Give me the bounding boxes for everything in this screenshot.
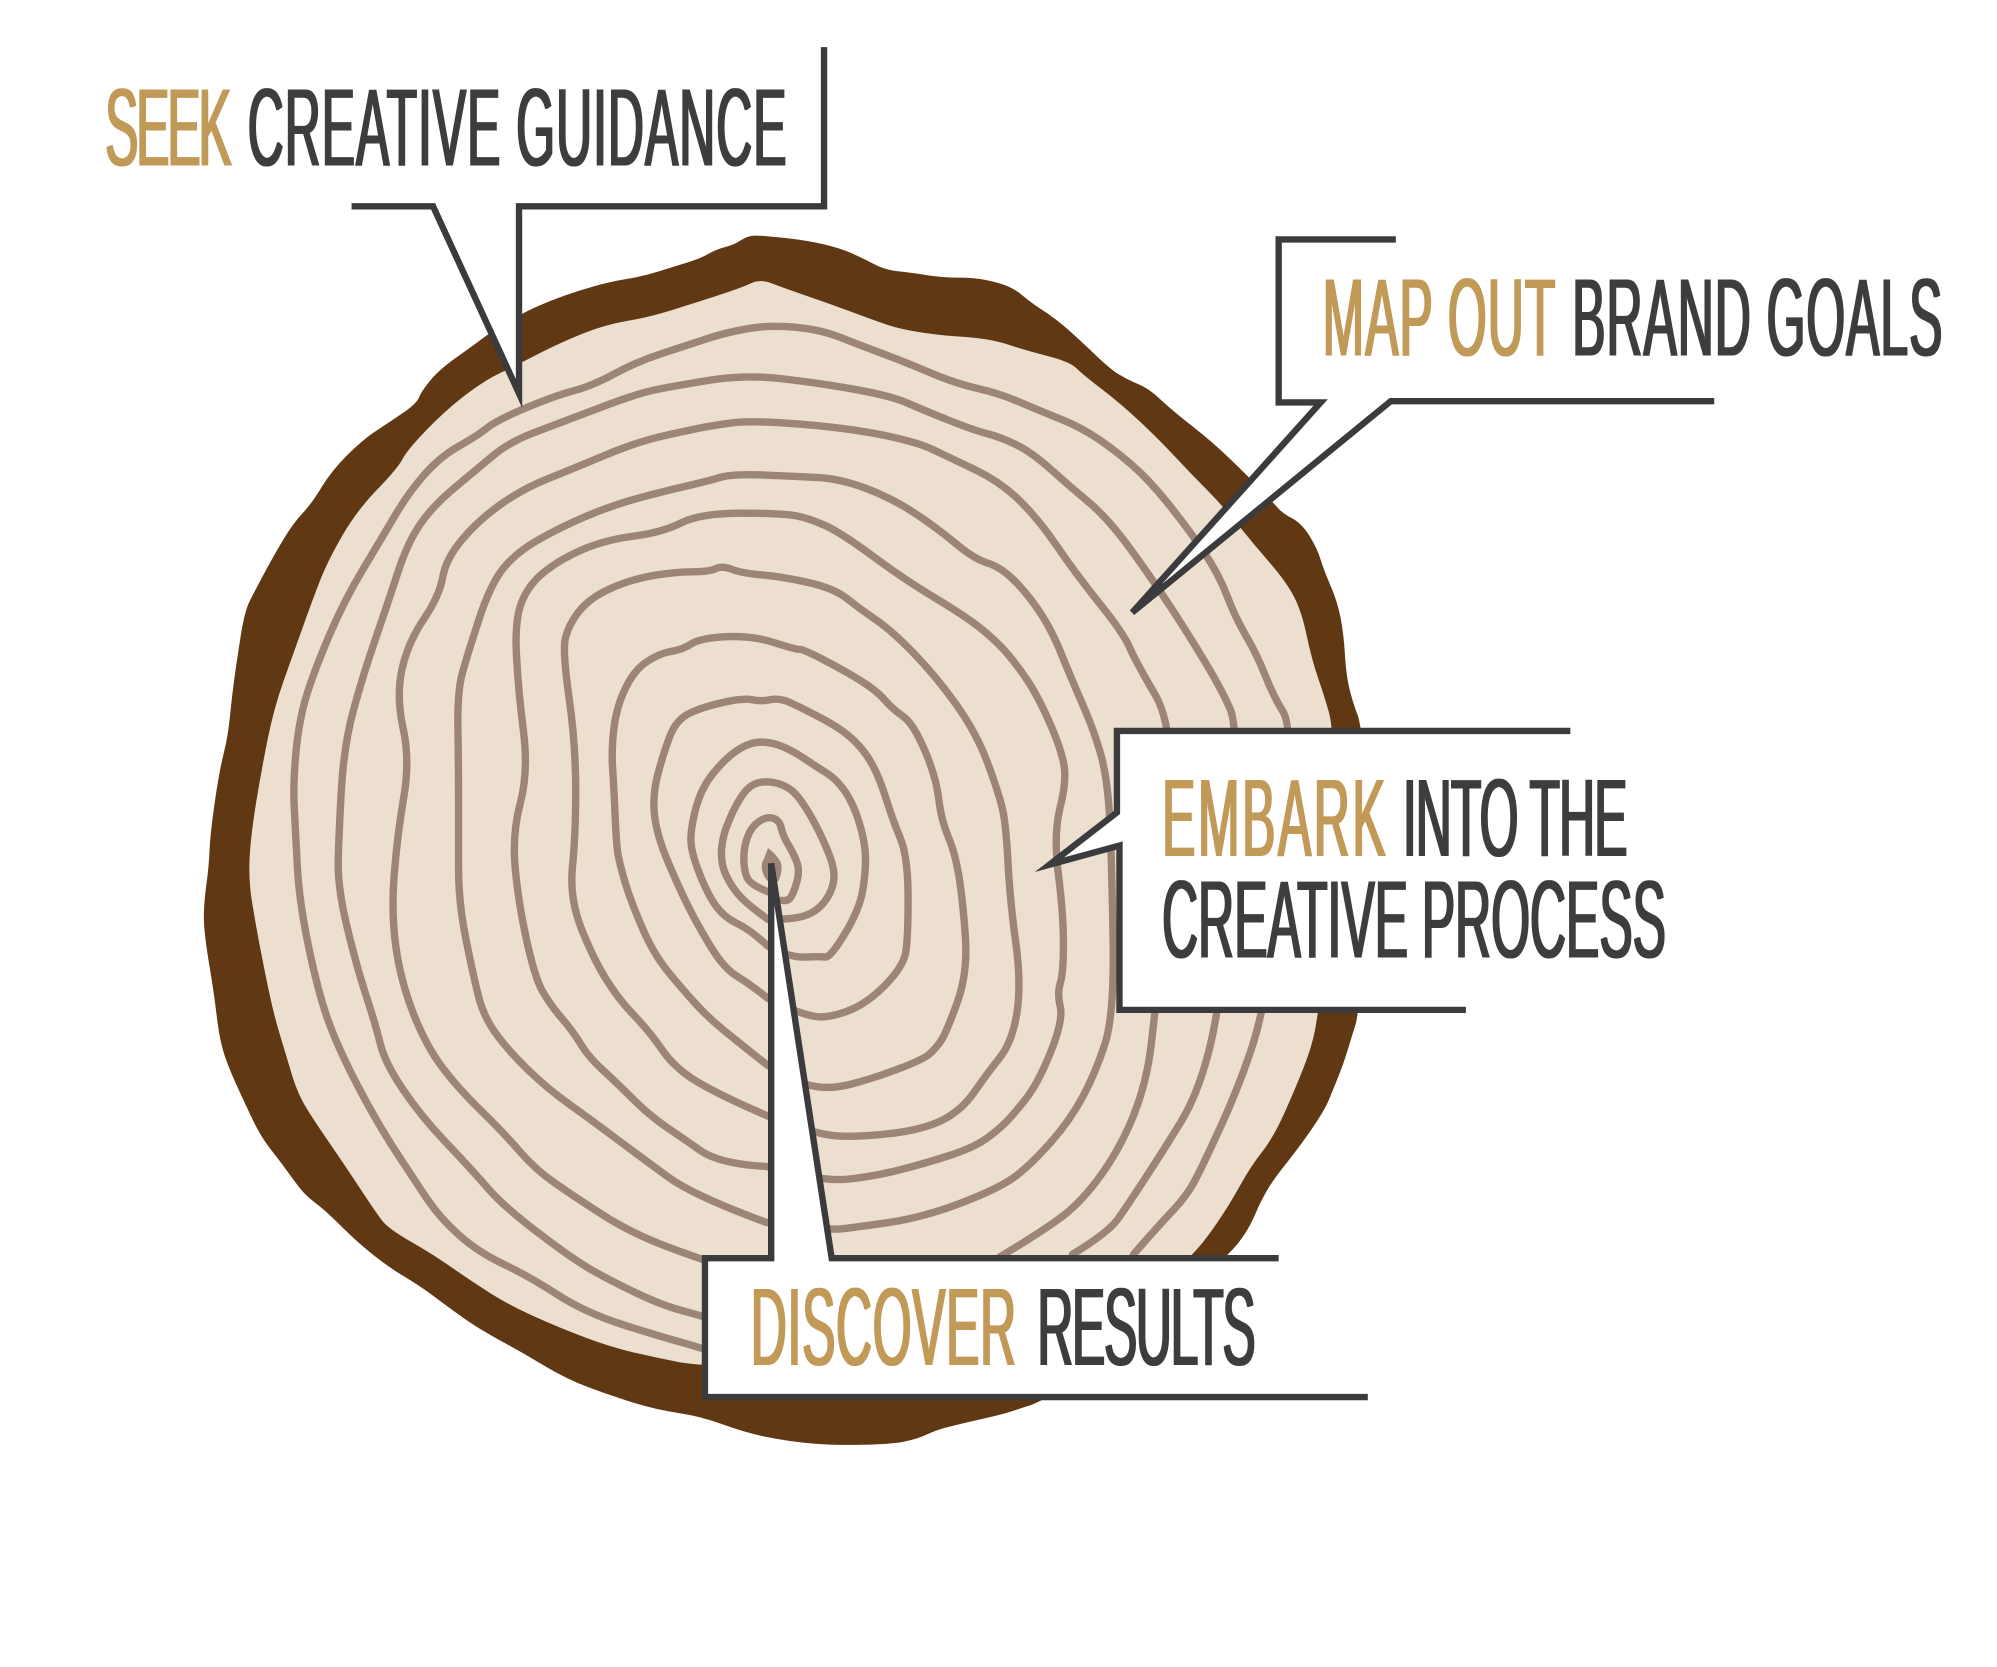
- growth rings: [294, 326, 1289, 1369]
- heading: [1323, 256, 1942, 380]
- bark: [204, 236, 1367, 1445]
- heading: DISCOVER: [751, 1266, 1016, 1390]
- wood surface: [249, 281, 1336, 1376]
- ring 5: [612, 637, 966, 1087]
- ring 9: [393, 422, 1171, 1280]
- callout frame: [1132, 239, 1714, 613]
- callout frame: [352, 47, 824, 394]
- heading: EMBARK: [1162, 756, 1386, 880]
- ring 6: [564, 567, 1019, 1136]
- callout: embark into the creative process: [1049, 731, 1666, 1010]
- ring 1: [744, 818, 798, 901]
- heading: SEEK: [105, 66, 232, 190]
- ring 10: [338, 377, 1235, 1335]
- ring 4: [654, 699, 908, 1017]
- heading: BRAND GOALS: [1572, 256, 1942, 380]
- callout: discover results: [705, 863, 1368, 1397]
- ring 7: [514, 513, 1065, 1180]
- callout frame: [1049, 731, 1570, 1010]
- callout: map out brand goals: [1132, 239, 1942, 613]
- callout frame: [705, 863, 1368, 1397]
- heading: [1162, 756, 1666, 982]
- ring 8: [458, 475, 1113, 1229]
- callout: seek creative guidance: [105, 47, 824, 394]
- heading: INTO THE: [1403, 756, 1627, 880]
- tree cross-section: [204, 236, 1367, 1445]
- heading: CREATIVE PROCESS: [1162, 858, 1666, 982]
- heading: [751, 1266, 1256, 1390]
- heading: CREATIVE GUIDANCE: [248, 66, 786, 190]
- ring 11: [294, 326, 1289, 1369]
- core: [762, 848, 782, 883]
- ring 2: [721, 782, 834, 919]
- heading: MAP OUT: [1323, 256, 1555, 380]
- ring 3: [691, 742, 866, 957]
- heading: RESULTS: [1037, 1266, 1256, 1390]
